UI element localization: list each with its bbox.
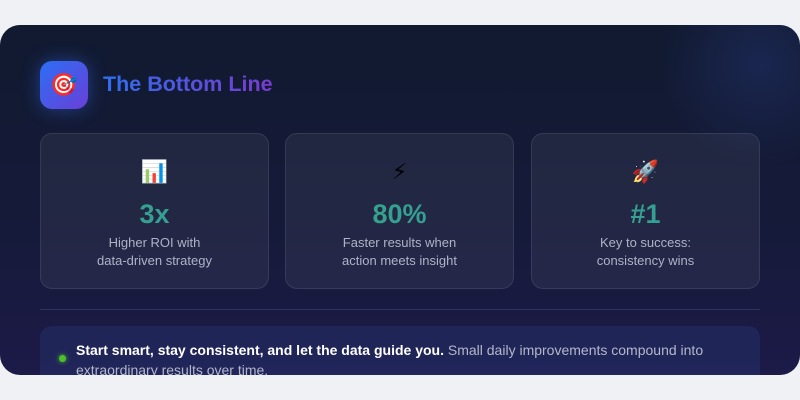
panel: 3x: data-driven strategy (97, 253, 212, 268)
callout: takeaway (40, 326, 760, 400)
panel: 80%: action meets insight (342, 253, 457, 268)
panel: 3x: Higher ROI with (109, 235, 200, 250)
panel: #1: 🚀 (632, 159, 659, 184)
panel: #1: #1 (630, 199, 661, 229)
panel: #1: Key to success: (600, 235, 691, 250)
icon: target logo (40, 61, 88, 109)
panel: 3x: 📊 (141, 159, 168, 184)
panel: #1: consistency wins (597, 253, 694, 268)
panel: #1 (531, 133, 760, 289)
title: The Bottom Line (103, 72, 273, 96)
icon: target logo: 🎯 (50, 72, 78, 97)
panel: 80%: ⚡ (392, 159, 407, 184)
panel: 80%: 80% (372, 199, 427, 229)
panel: 3x: 3x (139, 199, 170, 229)
panel: 3x (40, 133, 269, 289)
panel: 80%: Faster results when (343, 235, 456, 250)
panel: 80% (285, 133, 514, 289)
